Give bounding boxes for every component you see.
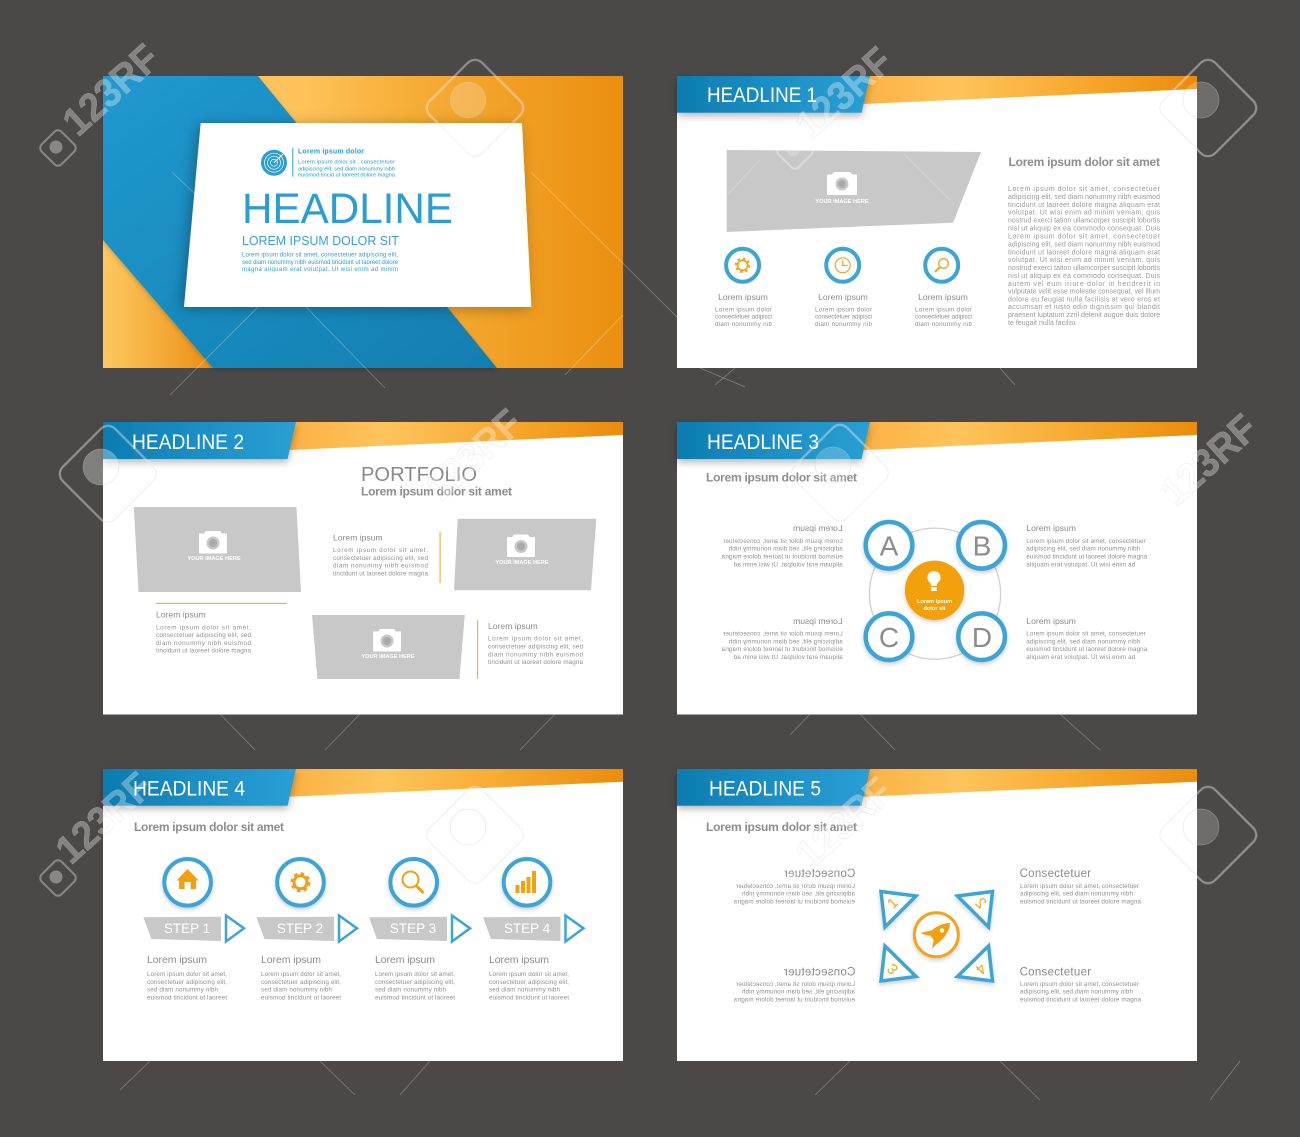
text D: aliquam erat volutpat. Ut wisi enim ad	[1026, 654, 1136, 661]
panel: headline 4 steps slide	[103, 769, 623, 1061]
icon: home circle	[164, 859, 211, 906]
watermark logo text: 123RF	[55, 36, 168, 144]
watermark logo text: 123RF	[1153, 406, 1266, 514]
divider line	[292, 148, 293, 177]
badge A	[866, 522, 912, 569]
watermark stamps: light outline and disc	[56, 56, 1260, 887]
text block 1: Lorem ipsum	[333, 532, 383, 542]
panel: headline 2 portfolio slide	[103, 422, 623, 714]
lower-left orange triangle	[103, 240, 213, 368]
blue header band	[103, 422, 296, 459]
feature column 2: Lorem ipsum	[818, 292, 868, 302]
text B: adipiscing elit, sed diam nonummy nibh	[1026, 546, 1141, 553]
subtitle: LOREM IPSUM DOLOR SIT	[242, 233, 399, 248]
panel: headline 1 slide	[677, 76, 1197, 368]
watermark logo text: 123RF	[788, 769, 901, 877]
step 2 text: Lorem ipsum dolor sit amet,	[261, 971, 341, 978]
triangle 3: 3	[884, 960, 902, 978]
badge A: A	[880, 530, 899, 562]
feature column 3: consectetuer adipisci	[915, 314, 972, 320]
text C mirrored: Lorem ipsum	[793, 616, 843, 626]
image placeholder 3: YOUR IMAGE HERE	[361, 654, 415, 660]
text 2: Consectetuer	[1020, 868, 1091, 880]
blue header band	[677, 76, 870, 113]
text 3 mirrored: adipiscing elit, sed diam nonummy nibh	[742, 989, 855, 996]
feature column 3: diam nonummy nib	[915, 321, 972, 328]
orange rule 1	[440, 532, 441, 583]
watermark logo text: 123RF	[418, 401, 531, 509]
icon: bars circle	[504, 859, 550, 906]
text 2: Lorem ipsum dolor sit amet, consectetuer	[1020, 883, 1139, 890]
watermark logo text: 123RF	[48, 764, 161, 872]
step 2 text: euismod tincidunt ut laoreet	[261, 995, 341, 1002]
arrow 3	[452, 916, 470, 942]
text B: aliquam erat volutpat. Ut wisi enim ad	[1026, 561, 1136, 568]
step 4 text	[489, 954, 569, 1002]
orange header strip	[290, 422, 623, 450]
subheading: Lorem ipsum dolor sit amet	[706, 470, 857, 484]
text D: euismod tincidunt ut laoreet dolore magna	[1026, 646, 1148, 653]
text block 1: consectetuer adipiscing elit, sed	[333, 555, 428, 562]
text C mirrored: Lorem ipsum dolor sit amet, consectetuer	[723, 631, 843, 638]
badge B: B	[973, 530, 991, 562]
card body text: sed diam nonummy nibh euismod tincidunt ut laoreet dolore	[242, 260, 399, 266]
watermark stamps: faint grey edge on white slides	[56, 56, 1260, 887]
right body text: volutpat. Ut wisi enim ad minim veniam, quis	[1008, 257, 1160, 264]
icon: search circle	[390, 859, 437, 906]
blue header band	[103, 769, 296, 806]
text C mirrored	[721, 616, 843, 661]
text block 3	[488, 621, 583, 666]
step 1 tag	[143, 917, 221, 941]
right body text: nostrud exerci tation ullamcorper suscipit lobortis	[1008, 218, 1160, 224]
heading: HEADLINE 2	[132, 430, 244, 454]
text A mirrored: aliquam erat volutpat. Ut wisi enim ad	[733, 561, 843, 568]
text 1 mirrored: Lorem ipsum dolor sit amet, consectetuer	[736, 883, 855, 890]
triangle 4	[958, 946, 992, 981]
text 4: Consectetuer	[1020, 966, 1091, 978]
text B: Lorem ipsum	[1026, 523, 1076, 533]
text block 3: Lorem ipsum	[488, 621, 538, 631]
card body text: magna aliquam erat volutpat. Ut wisi enim ad minim	[242, 267, 398, 273]
slide base	[677, 769, 1197, 1061]
icon: clock circle	[826, 249, 859, 282]
text block 2	[156, 610, 251, 655]
step 4 text: Lorem ipsum	[489, 954, 549, 966]
step 4 text: euismod tincidunt ut laoreet	[489, 995, 569, 1002]
step 3 tag	[369, 917, 447, 941]
text 1 mirrored	[734, 868, 855, 905]
right body text: Lorem ipsum dolor sit amet, consectetuer	[1008, 186, 1161, 193]
right body text: tincidunt ut laoreet dolore magna aliquam erat	[1008, 250, 1160, 256]
feature column 3: Lorem ipsum dolor	[915, 306, 972, 314]
icon: search circle	[925, 249, 958, 282]
arrow 1	[226, 916, 244, 942]
orange header strip	[290, 769, 623, 797]
step 4 tag: STEP 4	[504, 921, 551, 936]
step 3 tag: STEP 3	[390, 921, 436, 936]
orange slide background	[103, 76, 623, 368]
slide base	[103, 769, 623, 1061]
right body text: te feugait nulla facilisi.	[1008, 320, 1077, 327]
step 1 text: euismod tincidunt ut laoreet	[147, 995, 227, 1002]
right body text: vulputate velit esse molestie consequat, vel illum	[1008, 288, 1160, 296]
orange header strip	[860, 76, 1197, 104]
right body text: praesent luptatum zzril delenit augue duis dolore	[1008, 312, 1160, 319]
text C mirrored: adipiscing elit, sed diam nonummy nibh	[728, 638, 843, 645]
step 4 text: Lorem ipsum dolor sit amet,	[489, 971, 569, 978]
step 2 text: consectetuer adipiscing elit,	[261, 979, 341, 986]
text block 2: consectetuer adipiscing elit, sed	[156, 632, 251, 639]
text block 2: diam nonummy nibh euismod	[156, 640, 251, 647]
triangle 4: 4	[972, 960, 990, 978]
text block 2: Lorem ipsum	[156, 610, 206, 620]
text block 3: Lorem ipsum dolor sit amet,	[488, 636, 583, 643]
step 1 text: consectetuer adipiscing elit,	[147, 979, 227, 986]
text 1 mirrored: euismod tincidunt ut laoreet dolore magna	[734, 898, 855, 905]
right body text: Lorem ipsum dolor sit amet, consectetuer	[1008, 234, 1161, 240]
image placeholder 1	[134, 507, 301, 592]
feature column 2	[815, 292, 872, 328]
text 1 mirrored: Consectetuer	[784, 868, 855, 880]
card intro text: adipiscing elit, sed diam nonummy nibh	[298, 166, 395, 172]
step 1 text: Lorem ipsum dolor sit amet,	[147, 971, 227, 978]
badge B	[958, 522, 1005, 569]
right body text: dolore eu feugiat nulla facilisis at vero eros et	[1008, 296, 1160, 304]
step 2 text: Lorem ipsum	[261, 954, 321, 966]
image placeholder 2: YOUR IMAGE HERE	[495, 560, 549, 566]
image placeholder 3	[312, 615, 465, 679]
step 2 tag: STEP 2	[277, 921, 323, 936]
text D: Lorem ipsum	[1026, 616, 1076, 626]
card intro text: Lorem ipsum dolor sit , consectetuer	[298, 160, 395, 166]
image placeholder: YOUR IMAGE HERE	[815, 199, 869, 205]
text D: adipiscing elit, sed diam nonummy nibh	[1026, 638, 1141, 645]
watermark logo text: 123RF	[788, 39, 901, 147]
text B	[1026, 523, 1148, 568]
heading: HEADLINE 3	[707, 430, 819, 454]
text block 2: Lorem ipsum dolor sit amet,	[156, 624, 251, 631]
text block 3: consectetuer adipiscing elit, sed	[488, 643, 583, 650]
text 2: euismod tincidunt ut laoreet dolore magna	[1020, 898, 1141, 905]
step 3 text: Lorem ipsum	[375, 954, 435, 966]
text block 1: diam nonummy nibh euismod	[333, 563, 428, 570]
badge D	[958, 613, 1005, 660]
feature column 1: consectetuer adipisci	[715, 314, 772, 320]
text 2: adipiscing elit, sed diam nonummy nibh	[1020, 890, 1133, 898]
step 2 text: sed diam nonummy nibh	[261, 987, 332, 994]
center rocket badge	[914, 913, 958, 957]
subheading: Lorem ipsum dolor sit amet	[706, 820, 857, 834]
card body text: Lorem ipsum dolor sit amet, consectetuer adipiscing elit,	[242, 253, 398, 259]
triangle 3	[881, 946, 916, 981]
right body text: tincidunt ut laoreet dolore magna aliquam erat	[1008, 202, 1160, 209]
blue header band	[677, 422, 870, 459]
step 2 tag	[256, 917, 334, 941]
feature column 1: diam nonummy nib	[715, 321, 772, 328]
blue diagonal band	[103, 76, 497, 368]
text 3 mirrored	[734, 966, 855, 1004]
feature column 1: Lorem ipsum	[718, 292, 768, 302]
right body text: adipiscing elit, sed diam nonummy nibh euismod	[1008, 194, 1160, 201]
feature column 1: Lorem ipsum dolor	[715, 306, 772, 314]
center bulb badge: dolor sit	[924, 606, 946, 612]
center bulb badge	[905, 561, 964, 620]
arrow 2	[339, 916, 357, 942]
icon: target	[261, 150, 287, 176]
feature column 2: diam nonummy nib	[815, 321, 872, 328]
panel: title slide	[103, 76, 623, 368]
text D	[1026, 616, 1148, 661]
slide base	[103, 422, 623, 714]
text 3 mirrored: euismod tincidunt ut laoreet dolore magna	[734, 997, 855, 1004]
triangle 1	[881, 892, 916, 927]
text block 3: diam nonummy nibh euismod	[488, 651, 583, 658]
text D: Lorem ipsum dolor sit amet, consectetuer	[1026, 631, 1146, 638]
white title card	[184, 123, 531, 307]
right body text: nisl ut aliquip ex ea commodo consequat. Duis	[1008, 226, 1160, 232]
text 3 mirrored: Consectetuer	[784, 966, 855, 978]
card intro text: euismod tincid ut laoreet dolore magna	[298, 173, 396, 179]
card intro text	[298, 148, 396, 179]
text 2	[1020, 868, 1141, 905]
heading: HEADLINE 4	[133, 776, 245, 800]
slide base	[677, 422, 1197, 714]
text block 3: tincidunt ut laoreet dolore magna	[488, 659, 583, 666]
slide base	[677, 76, 1197, 368]
step 1 text	[147, 954, 227, 1002]
feature column 2: consectetuer adipisci	[815, 314, 872, 320]
main headline: HEADLINE	[242, 185, 453, 233]
badge C: C	[879, 622, 899, 653]
image placeholder 2	[454, 519, 596, 590]
heading: HEADLINE 5	[709, 776, 821, 800]
orange rule 2	[156, 603, 287, 604]
card body text	[242, 253, 399, 273]
step 3 text: consectetuer adipiscing elit,	[375, 979, 455, 986]
text A mirrored: adipiscing elit, sed diam nonummy nibh	[728, 546, 843, 553]
image placeholder 1: YOUR IMAGE HERE	[187, 556, 241, 562]
watermark logo text	[48, 36, 1266, 877]
step 3 text	[375, 954, 455, 1002]
image placeholder	[727, 150, 981, 232]
text B: euismod tincidunt ut laoreet dolore magna	[1026, 554, 1148, 561]
right body text: autem vel eum iriure dolor in hendrerit in	[1008, 281, 1160, 288]
right body text: accumsan et iusto odio dignissim qui blandit	[1008, 304, 1160, 311]
text block 1	[333, 532, 428, 578]
text 3 mirrored: Lorem ipsum dolor sit amet, consectetuer	[736, 981, 855, 988]
text 1 mirrored: adipiscing elit, sed diam nonummy nibh	[742, 890, 855, 898]
badge D: D	[972, 622, 992, 653]
step 1 text: sed diam nonummy nibh	[147, 987, 218, 994]
triangle 2: 2	[972, 894, 990, 912]
panel: headline 5 slide	[677, 769, 1197, 1061]
right body text: nisl ut aliquip ex ea commodo consequat. Duis	[1008, 273, 1160, 280]
center bulb badge: Lorem ipsum	[917, 599, 952, 605]
orange header strip	[864, 422, 1197, 450]
orange header strip	[864, 769, 1197, 797]
triangle 1: 1	[884, 894, 902, 912]
right body text: volutpat. Ut wisi enim ad minim veniam, quis	[1008, 210, 1160, 216]
blue header band	[677, 769, 870, 806]
text block 2: tincidunt ut laoreet dolore magna	[156, 648, 251, 655]
icon: gear circle	[277, 859, 324, 906]
text 4	[1020, 966, 1141, 1004]
subheading: Lorem ipsum dolor sit amet	[134, 820, 284, 834]
badge C	[866, 613, 912, 660]
watermark camera marks	[38, 128, 1180, 900]
triangle 2	[958, 892, 992, 927]
step 1 tag: STEP 1	[164, 921, 210, 936]
step 3 text: sed diam nonummy nibh	[375, 987, 446, 994]
text block 1: Lorem ipsum dolor sit amet,	[333, 547, 428, 554]
text block 1: tincidunt ut laoreet dolore magna	[333, 570, 428, 578]
text A mirrored: euismod tincidunt ut laoreet dolore magna	[721, 554, 843, 561]
panel: headline 3 ABCD slide	[677, 422, 1197, 714]
feature column 2: Lorem ipsum dolor	[815, 306, 872, 314]
step 3 text: Lorem ipsum dolor sit amet,	[375, 971, 455, 978]
text 4: euismod tincidunt ut laoreet dolore magna	[1020, 997, 1141, 1004]
text 4: adipiscing elit, sed diam nonummy nibh	[1020, 989, 1133, 996]
arrow 4	[566, 916, 584, 942]
feature column 3: Lorem ipsum	[918, 292, 968, 302]
step 4 text: consectetuer adipiscing elit,	[489, 979, 569, 986]
step 3 text: euismod tincidunt ut laoreet	[375, 995, 455, 1002]
right heading: Lorem ipsum dolor sit amet	[1008, 155, 1160, 169]
feature column 3	[915, 292, 972, 328]
feature column 1	[715, 292, 772, 328]
right body text: adipiscing elit, sed diam nonummy nibh euismod	[1008, 242, 1160, 248]
portfolio subtitle: Lorem ipsum dolor sit amet	[361, 484, 512, 498]
step 4 tag	[483, 917, 560, 941]
step 4 text: sed diam nonummy nibh	[489, 987, 560, 994]
heading: HEADLINE 1	[707, 83, 817, 107]
icon: gear circle	[726, 249, 759, 282]
right body text	[1008, 186, 1161, 327]
text C mirrored: aliquam erat volutpat. Ut wisi enim ad	[733, 654, 843, 661]
right body text: nostrud exerci tation ullamcorper suscipit lobortis	[1008, 265, 1160, 272]
portfolio title: PORTFOLIO	[361, 464, 477, 486]
text C mirrored: euismod tincidunt ut laoreet dolore magna	[721, 646, 843, 653]
step 1 text: Lorem ipsum	[147, 954, 207, 966]
step 2 text	[261, 954, 341, 1002]
text B: Lorem ipsum dolor sit amet, consectetuer	[1026, 538, 1146, 545]
text A mirrored: Lorem ipsum	[793, 523, 843, 533]
text A mirrored: Lorem ipsum dolor sit amet, consectetuer	[723, 538, 843, 545]
connecting ring	[869, 528, 1001, 659]
orange rule 3	[477, 620, 478, 679]
text 4: Lorem ipsum dolor sit amet, consectetuer	[1020, 981, 1139, 988]
text A mirrored	[721, 523, 843, 568]
card intro text: Lorem ipsum dolor	[298, 148, 364, 156]
